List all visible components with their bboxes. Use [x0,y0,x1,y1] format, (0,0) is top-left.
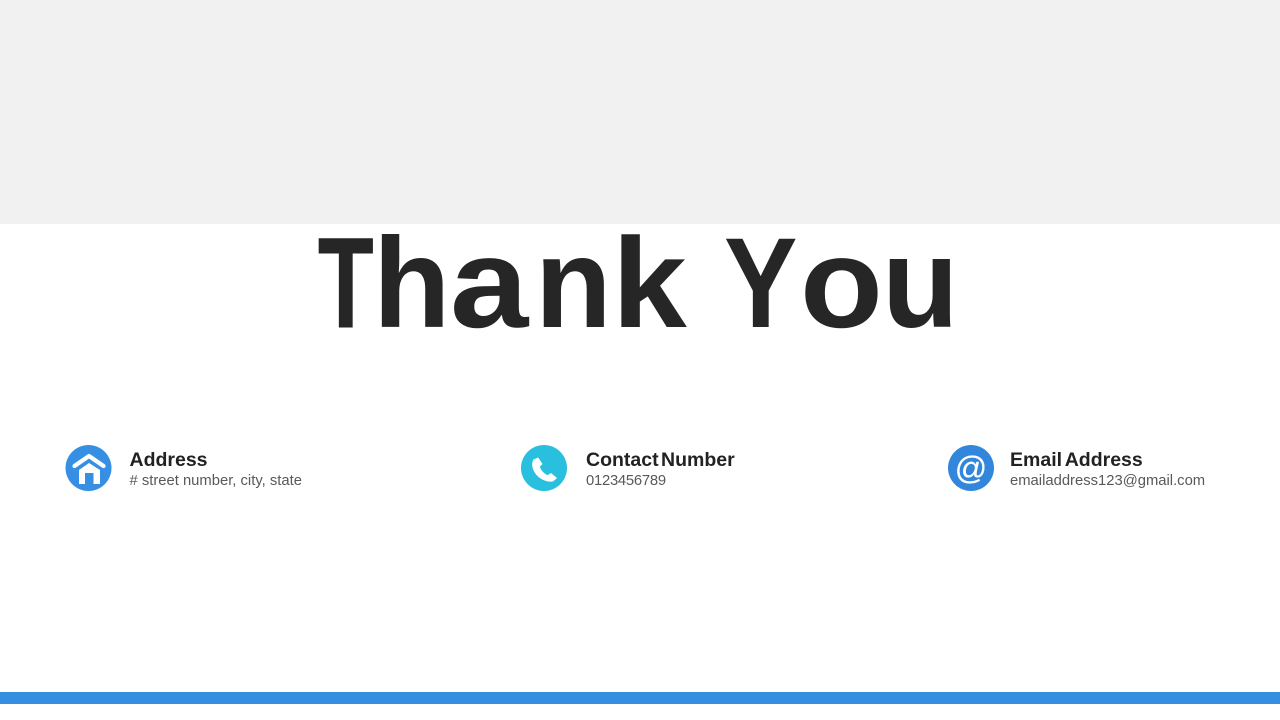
email heading: Email Address [1010,449,1143,471]
title: a [450,212,529,355]
title [318,212,959,355]
contact item: address [66,445,302,491]
title: T [318,212,374,355]
title: h [373,212,450,355]
email text: emailaddress123@gmail.com [1010,473,1205,489]
top grey panel [0,0,1280,224]
contact number heading: Contact Number [586,449,735,471]
title: Y [724,212,798,355]
contact number text: 0123456789 [586,473,666,489]
icon: house [66,445,112,491]
address heading: Address [130,449,208,471]
address text: # street number, city, state [130,473,302,489]
icon: at sign [948,445,994,491]
title: o [800,212,882,355]
bottom blue bar [0,692,1280,704]
title: u [882,212,959,355]
contact item: email [948,445,1205,491]
icon: phone [521,445,567,491]
title: n [535,212,612,355]
contact item: phone [521,445,735,491]
icon: at sign: @ [955,450,987,486]
title: k [612,212,686,355]
